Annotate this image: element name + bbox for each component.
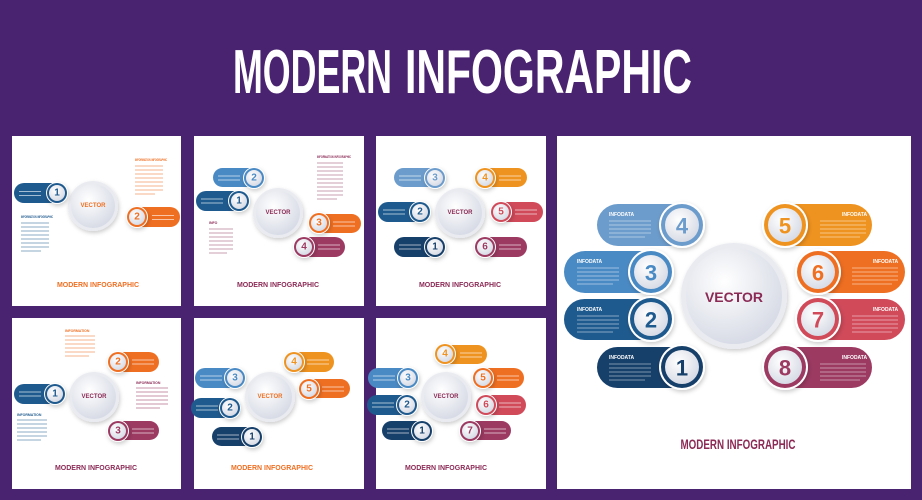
step 4 <box>293 236 345 258</box>
text blocks: INFORMATION <box>65 329 90 333</box>
step 7: 7 <box>467 426 473 436</box>
step 1 <box>597 344 705 390</box>
step 1: 1 <box>236 196 242 206</box>
title: INFOGRAPHIC <box>405 38 692 107</box>
step 1: INFODATA <box>609 355 634 361</box>
step 3 <box>308 212 361 234</box>
step 2 <box>564 296 674 342</box>
panel: 7-step <box>367 318 546 489</box>
step 4 <box>474 167 527 189</box>
step 5 <box>298 378 350 400</box>
center circle: VECTOR <box>266 210 291 216</box>
step 2: 2 <box>227 402 233 414</box>
step 4: 4 <box>482 172 488 184</box>
text block: dark <box>21 215 53 251</box>
step 7 <box>459 420 511 442</box>
step 1: 1 <box>419 426 425 436</box>
step 6 <box>474 236 527 258</box>
step 3: 3 <box>232 372 238 384</box>
step 4: 4 <box>442 348 448 360</box>
step 1 <box>196 190 250 212</box>
center circle <box>253 188 303 238</box>
step 6: 6 <box>482 242 488 252</box>
step 5 <box>490 201 543 223</box>
step 1: 1 <box>54 188 60 198</box>
step 2 <box>126 206 180 228</box>
step 1: 1 <box>52 388 58 400</box>
step 3 <box>368 367 419 389</box>
step 8 <box>762 344 872 390</box>
center circle: VECTOR <box>434 394 459 400</box>
step 2: 2 <box>251 172 257 184</box>
step 5: 5 <box>480 372 486 384</box>
panel: 4-step <box>194 136 364 306</box>
step 2 <box>191 397 241 419</box>
center circle <box>69 372 119 422</box>
panel: 6-step <box>376 136 546 306</box>
step 3 <box>564 249 674 295</box>
step 4 <box>283 351 334 373</box>
text blocks: INFORMATION <box>136 381 161 385</box>
center circle: VECTOR <box>258 394 283 400</box>
text block right: INFORMATION INFOGRAPHIC <box>317 155 351 159</box>
center circle <box>68 181 118 231</box>
center circle: VECTOR <box>705 289 763 305</box>
center circle: VECTOR <box>82 394 107 400</box>
panel: 8-step large <box>557 136 911 489</box>
center circle: VECTOR <box>448 210 473 216</box>
panel: 3-step <box>12 318 181 489</box>
panel title: MODERN INFOGRAPHIC <box>680 436 796 452</box>
center circle <box>435 188 485 238</box>
step 1: 1 <box>676 356 688 380</box>
step 2: 2 <box>645 308 657 332</box>
panel title: MODERN INFOGRAPHIC <box>237 282 319 289</box>
panel title: MODERN INFOGRAPHIC <box>419 282 501 289</box>
title: MODERN <box>233 38 392 107</box>
step 1 <box>382 420 433 442</box>
center circle <box>421 372 471 422</box>
step 2: 2 <box>134 212 140 222</box>
step 3: 3 <box>432 172 438 184</box>
step 3: INFODATA <box>577 259 602 265</box>
step 3 <box>107 420 159 442</box>
step 2: 2 <box>404 400 410 410</box>
panel title: MODERN INFOGRAPHIC <box>55 465 137 472</box>
panel title: MODERN INFOGRAPHIC <box>57 282 139 289</box>
step 3 <box>195 367 246 389</box>
step 3 <box>394 167 446 189</box>
text block: orange <box>135 158 167 194</box>
step 5: 5 <box>779 214 791 238</box>
step 4: INFODATA <box>609 212 634 218</box>
step 3: 3 <box>316 218 322 228</box>
title <box>233 38 692 107</box>
step 8: INFODATA <box>842 355 867 361</box>
panel: 5-step <box>191 318 364 489</box>
step 3: 3 <box>645 260 657 286</box>
step 2 <box>367 394 418 416</box>
text block: orange: INFORMATION INFOGRAPHIC <box>135 158 167 162</box>
step 7: 7 <box>812 308 824 332</box>
step 2: INFODATA <box>577 307 602 313</box>
step 2: 2 <box>115 356 121 368</box>
step 6: 6 <box>483 400 489 410</box>
step 1: 1 <box>249 432 255 442</box>
text block right <box>317 155 351 199</box>
step 1: 1 <box>432 242 438 252</box>
step 1 <box>14 182 68 204</box>
center circle: VECTOR <box>81 203 106 209</box>
panel title: MODERN INFOGRAPHIC <box>231 465 313 472</box>
panel title: MODERN INFOGRAPHIC <box>405 465 487 472</box>
center circle <box>681 243 787 349</box>
text block left <box>209 221 233 253</box>
text blocks <box>17 329 168 440</box>
step 1 <box>394 236 446 258</box>
step 5 <box>762 202 872 248</box>
step 7 <box>795 296 905 342</box>
step 1 <box>14 383 66 405</box>
text blocks: INFORMATION <box>17 413 42 417</box>
step 5: 5 <box>498 206 504 218</box>
step 2: 2 <box>417 206 423 218</box>
panel: 2-step <box>12 136 181 306</box>
step 6 <box>475 394 526 416</box>
step 6: INFODATA <box>873 259 898 265</box>
center circle <box>245 372 295 422</box>
step 4: 4 <box>301 242 307 252</box>
step 5 <box>472 367 524 389</box>
step 5: INFODATA <box>842 212 867 218</box>
step 2 <box>107 351 159 373</box>
step 4: 4 <box>291 356 297 368</box>
step 6: 6 <box>812 260 824 286</box>
step 4: 4 <box>676 214 689 238</box>
step 1 <box>212 426 263 448</box>
text block: dark: INFORMATION INFOGRAPHIC <box>21 215 53 219</box>
step 2 <box>378 201 431 223</box>
step 4 <box>597 202 705 248</box>
step 8: 8 <box>779 356 791 380</box>
step 4 <box>434 343 487 365</box>
step 7: INFODATA <box>873 307 898 313</box>
text block left: INFO <box>209 221 218 225</box>
step 5: 5 <box>306 384 312 394</box>
step 2 <box>213 167 265 189</box>
step 6 <box>795 249 905 295</box>
step 3: 3 <box>405 372 411 384</box>
step 3: 3 <box>115 426 121 436</box>
